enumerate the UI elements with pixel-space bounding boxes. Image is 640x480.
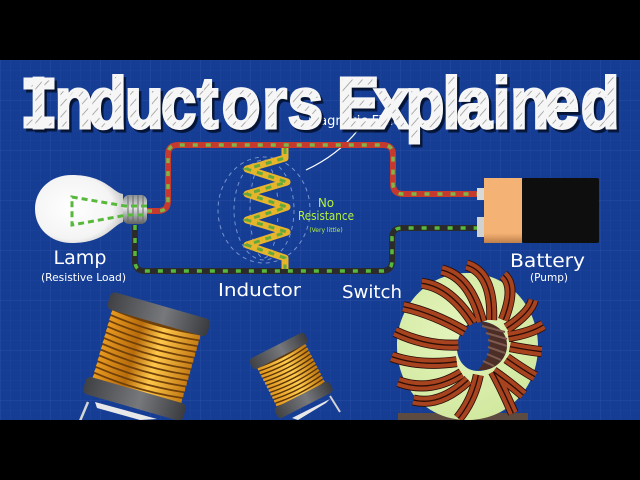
title text (25, 64, 619, 144)
title shadow: Explained (340, 67, 622, 147)
toroidal inductor (392, 265, 543, 421)
label: no resistance: (Very little) (309, 227, 343, 234)
label: lamp: Lamp (54, 247, 106, 269)
label: lamp: (Resistive Load) (41, 272, 126, 284)
label: battery: (Pump) (530, 272, 568, 284)
magnetic field lines (218, 157, 310, 263)
label: no resistance: Resistance (298, 209, 354, 223)
black return wire (135, 225, 477, 271)
label: no resistance: No (318, 196, 334, 210)
icon: lamp (35, 175, 147, 243)
label: battery: Battery (510, 250, 585, 272)
callout line (306, 130, 358, 170)
label: inductor: Inductor (218, 280, 302, 301)
label: switch: Switch (342, 282, 402, 303)
inductor coil symbol (247, 148, 287, 269)
icon: battery (477, 178, 599, 243)
label: no resistance (298, 196, 354, 234)
small wire-wound inductor (248, 332, 340, 420)
title text: Explained (337, 64, 619, 144)
title shadow (28, 67, 622, 147)
label: lamp (41, 247, 126, 284)
title text: Inductors (30, 64, 323, 144)
large wire-wound inductor (80, 291, 211, 422)
red positive wire (147, 145, 477, 211)
title shadow: Inductors (32, 67, 325, 147)
title (25, 64, 622, 147)
label: magnetic field: Magnetic Field (308, 114, 402, 129)
label: battery (510, 250, 585, 284)
